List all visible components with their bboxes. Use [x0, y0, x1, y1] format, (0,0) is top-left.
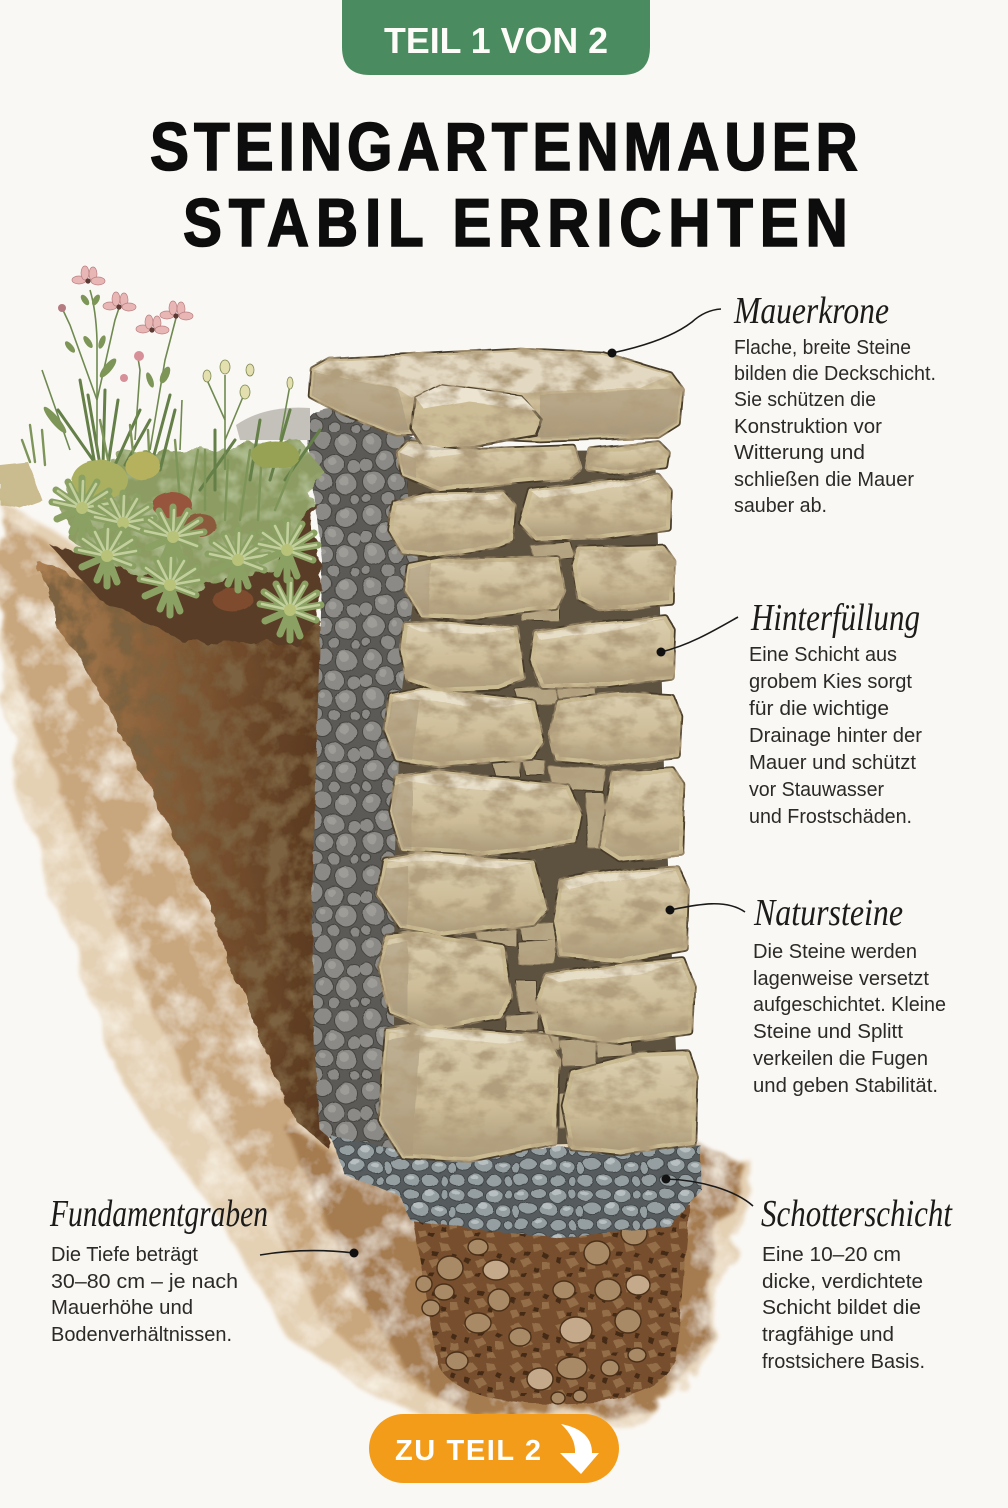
description: Konstruktion vor	[734, 416, 882, 438]
label: Natursteine: Natursteine	[753, 892, 903, 934]
description: Die Tiefe beträgt	[51, 1244, 198, 1266]
cap front stone	[412, 385, 542, 450]
small wedge stones	[478, 544, 631, 1126]
description: verkeilen die Fugen	[753, 1048, 928, 1070]
backfill gravel column	[306, 408, 420, 1170]
description: Eine Schicht aus	[749, 644, 897, 666]
left side faces in shade	[312, 372, 680, 1155]
label: Fundamentgraben	[49, 1193, 359, 1346]
description: grobem Kies sorgt	[749, 671, 912, 693]
button: to part 2	[369, 1414, 619, 1483]
description: tragfähige und	[762, 1324, 894, 1346]
description: Die Steine werden	[753, 941, 917, 963]
pale stone behind plants	[236, 408, 310, 440]
pale buds	[203, 360, 293, 399]
description: Mauer und schützt	[749, 752, 916, 774]
label: Hinterfüllung: Hinterfüllung	[750, 597, 920, 639]
light tan slope	[0, 515, 440, 1390]
description: frostsichere Basis.	[762, 1351, 925, 1373]
description: Drainage hinter der	[749, 725, 922, 747]
dark soil band	[35, 560, 325, 1145]
plants on top of the slope	[0, 266, 322, 645]
connector line	[260, 1248, 358, 1258]
description: Sie schützen die	[734, 389, 876, 411]
description: bilden die Deckschicht.	[734, 363, 936, 385]
description: und geben Stabilität.	[753, 1075, 938, 1097]
soil cross-section	[0, 500, 755, 1430]
top badge: part 1 of 2: TEIL 1 VON 2	[384, 20, 608, 61]
description: für die wichtige	[749, 698, 889, 720]
pink flowers	[58, 266, 193, 382]
label: Schotterschicht	[662, 1174, 953, 1373]
description	[762, 1244, 925, 1373]
foundation gravel layer	[330, 1135, 702, 1238]
description: lagenweise versetzt	[753, 968, 929, 990]
top badge: part 1 of 2	[342, 0, 650, 75]
description: Flache, breite Steine	[734, 337, 911, 359]
connector line	[666, 904, 745, 914]
icon: curved down arrow	[560, 1424, 599, 1474]
yellow-green clumps	[72, 441, 299, 500]
description	[749, 644, 922, 828]
description: Eine 10–20 cm	[762, 1244, 901, 1266]
mid-green plant mass	[60, 440, 322, 590]
title: STEINGARTENMAUER	[150, 110, 858, 185]
description	[51, 1244, 238, 1346]
label: Mauerkrone	[608, 290, 936, 517]
reddish cushions	[152, 492, 253, 612]
rosettes	[52, 478, 321, 640]
grass blades	[22, 380, 320, 520]
description: aufgeschichtet. Kleine	[753, 994, 946, 1016]
label: Hinterfüllung	[656, 597, 922, 828]
description: und Frostschäden.	[749, 806, 912, 828]
outer watercolor wash	[0, 500, 755, 1430]
description: 30–80 cm – je nach	[51, 1271, 238, 1293]
cap slab top	[314, 351, 670, 398]
large stones	[312, 351, 694, 1159]
label: Fundamentgraben: Fundamentgraben	[49, 1193, 268, 1235]
description: schließen die Mauer	[734, 469, 914, 491]
trench fill	[412, 1205, 690, 1404]
left ochre moss	[0, 462, 42, 508]
description: Schicht bildet die	[762, 1297, 921, 1319]
description: Witterung und	[734, 442, 865, 464]
trench surround soil	[285, 1125, 745, 1415]
label: Schotterschicht: Schotterschicht	[761, 1193, 953, 1235]
connector line	[608, 309, 721, 358]
title	[150, 110, 858, 261]
label: Mauerkrone: Mauerkrone	[733, 290, 889, 332]
description: Steine und Splitt	[753, 1021, 903, 1043]
dark joint backing behind the wall	[394, 450, 680, 1150]
tall flower stems	[42, 290, 290, 470]
natural stones wall	[312, 351, 694, 1159]
description: sauber ab.	[734, 495, 827, 517]
trench stones	[416, 1221, 650, 1404]
connector line	[662, 1174, 753, 1206]
description	[734, 337, 936, 517]
top-edge highlights	[386, 444, 682, 1043]
button: to part 2: ZU TEIL 2	[395, 1435, 541, 1467]
description: dicke, verdichtete	[762, 1271, 923, 1293]
dark earth in planting	[50, 500, 322, 645]
connector line	[656, 617, 738, 656]
description: vor Stauwasser	[749, 779, 884, 801]
label: Natursteine	[666, 892, 946, 1097]
description: Bodenverhältnissen.	[51, 1324, 232, 1346]
description	[753, 941, 946, 1097]
title: STABIL ERRICHTEN	[183, 186, 848, 261]
stem leaves	[41, 293, 172, 436]
description: Mauerhöhe und	[51, 1297, 193, 1319]
